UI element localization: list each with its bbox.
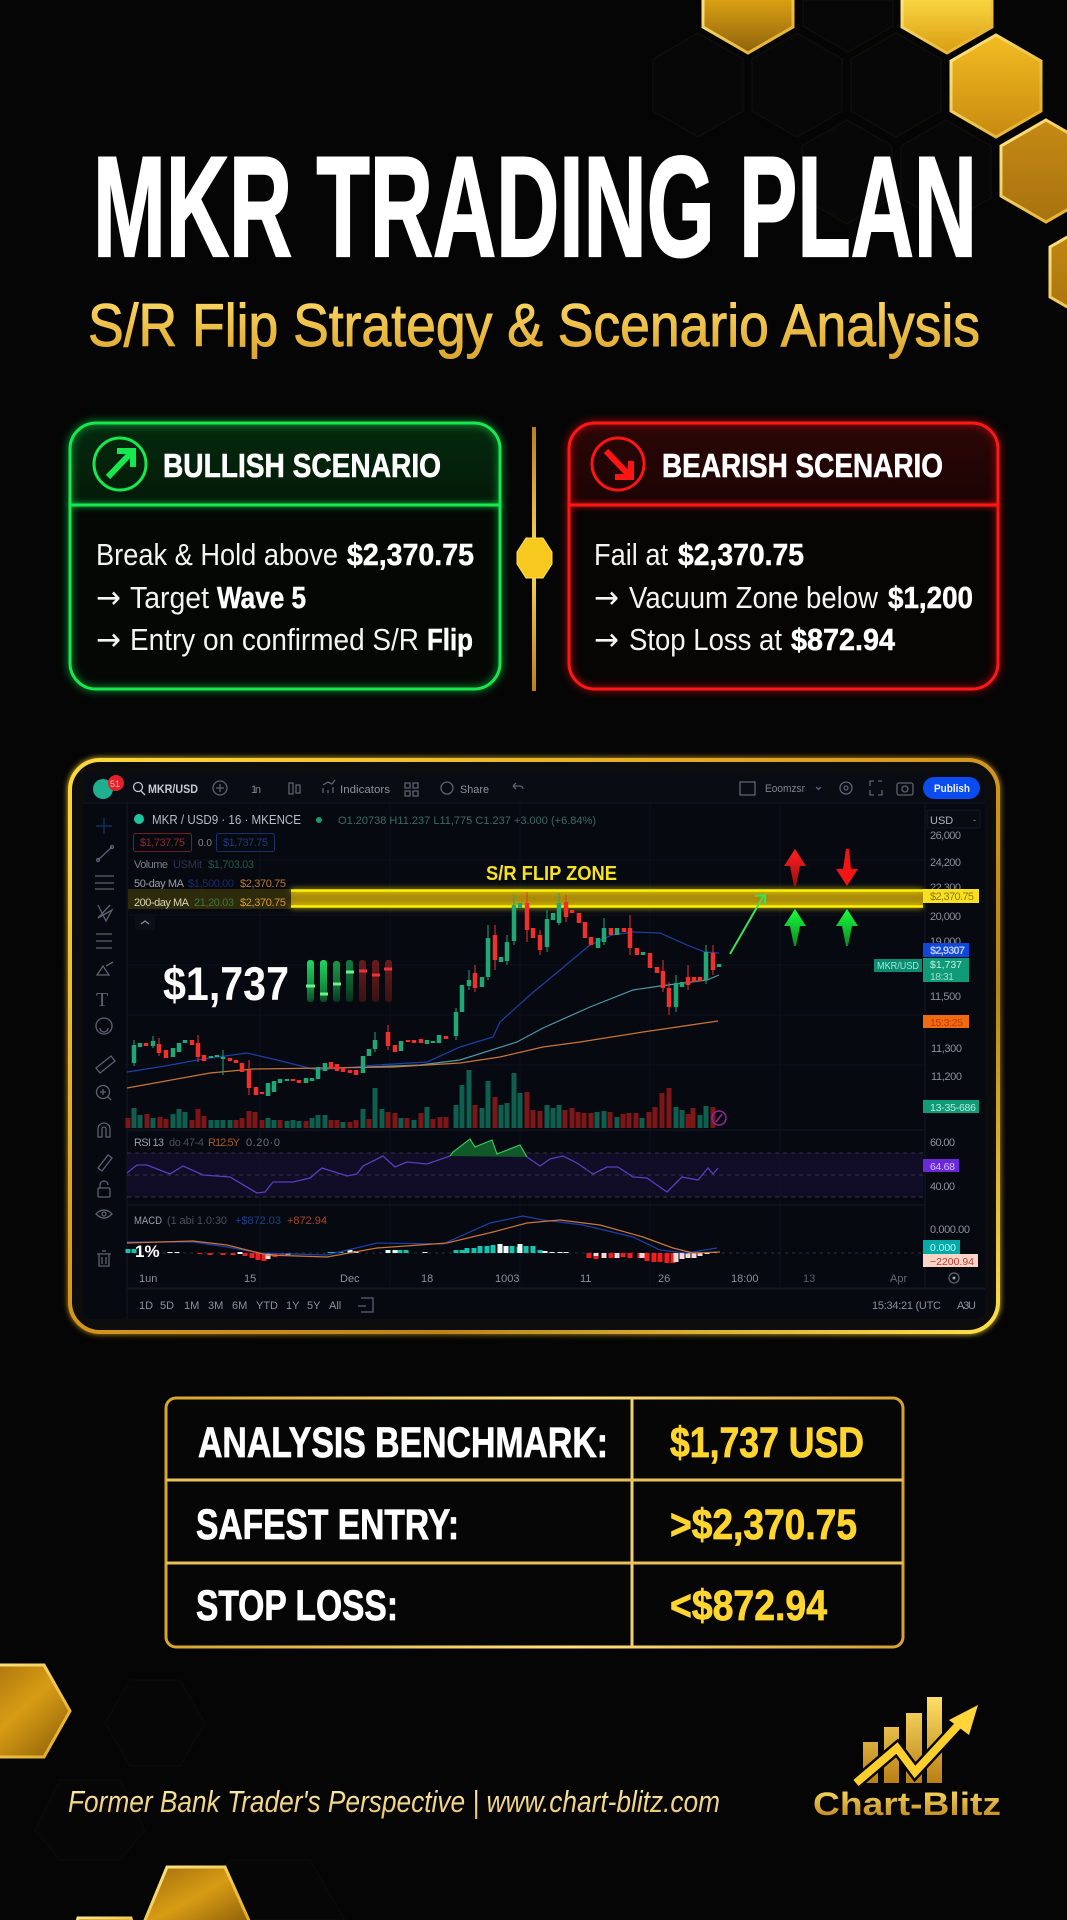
price axis: 19,000 xyxy=(930,936,961,948)
breakout arrow xyxy=(730,895,765,954)
bullish body text: → xyxy=(96,580,121,616)
time axis: 18 xyxy=(421,1273,433,1285)
panel: key levels table xyxy=(166,1398,903,1647)
chart legend text: 50-day MA xyxy=(134,878,185,890)
time axis: 11 xyxy=(580,1273,591,1285)
chart legend text: $1,737.75 xyxy=(140,837,185,849)
wordmark: Chart-Blitz xyxy=(813,1786,1001,1822)
RSI panel: 0.20·0 xyxy=(246,1137,280,1149)
subtitle: S/R Flip Strategy & Scenario Analysis xyxy=(88,292,980,359)
flip arrows xyxy=(784,849,858,946)
chart toolbar: 51 xyxy=(110,779,120,789)
S/R flip zone band: $2,370.75 xyxy=(240,897,286,909)
chart legend text: $1,737.75 xyxy=(223,837,268,849)
panel: bearish scenario xyxy=(569,423,998,689)
price axis: 13-35-686 xyxy=(930,1102,976,1114)
price axis: −2200.94 xyxy=(930,1256,974,1268)
price callout: $1,737 xyxy=(163,957,289,1010)
zone label: S/R FLIP ZONE xyxy=(486,863,617,885)
row: stop loss: STOP LOSS: xyxy=(196,1582,398,1630)
chart legend text: 0.0 xyxy=(198,838,212,849)
bullish body text: Entry on confirmed S/R xyxy=(130,622,419,657)
price axis: 0.000 xyxy=(930,1242,956,1254)
range selector: 1D xyxy=(139,1300,153,1312)
drawing tools sidebar: T xyxy=(96,989,108,1011)
price axis: 24,200 xyxy=(930,857,961,869)
hexagon xyxy=(1050,221,1067,323)
RSI panel: do 47-4 xyxy=(169,1137,204,1149)
price axis xyxy=(874,810,980,1268)
bearish body text: $1,200 xyxy=(888,580,973,615)
chart toolbar: Publish xyxy=(934,783,970,795)
price axis: 60.00 xyxy=(930,1137,955,1149)
price axis: 0.000.00 xyxy=(930,1224,970,1236)
bullish body text: Wave 5 xyxy=(217,580,306,615)
chart legend text: USMit xyxy=(173,859,202,871)
row: analysis benchmark: ANALYSIS BENCHMARK: xyxy=(198,1419,608,1467)
hexagon xyxy=(902,0,992,53)
hexagon xyxy=(951,35,1041,137)
bullish body text: $2,370.75 xyxy=(347,537,474,572)
logo: Chart-Blitz xyxy=(813,1697,1001,1822)
RSI panel: R12.5Y xyxy=(208,1137,241,1149)
range selector: 5Y xyxy=(307,1300,321,1312)
price axis: 15:3:25 xyxy=(930,1017,963,1029)
chart toolbar: Share xyxy=(460,784,489,796)
icon: rising bars and arrow xyxy=(856,1697,978,1783)
mini signal bars xyxy=(306,960,392,1002)
bearish body text: $872.94 xyxy=(791,622,896,657)
price axis: 11,500 xyxy=(930,991,961,1003)
MACD panel: (1 abi 1.0:30 xyxy=(167,1215,227,1227)
green up arrow xyxy=(836,909,858,946)
time axis xyxy=(139,1273,959,1285)
chart legend text: $2,370.75 xyxy=(240,878,286,890)
bearish heading: BEARISH SCENARIO xyxy=(662,447,943,484)
time axis: 1003 xyxy=(495,1273,519,1285)
time axis: 1un xyxy=(139,1273,157,1285)
MACD panel: +$872.03 xyxy=(235,1215,281,1227)
bearish body text: → xyxy=(594,622,619,658)
price axis: 64.68 xyxy=(930,1161,955,1173)
volume bars xyxy=(128,1070,713,1128)
time axis: 26 xyxy=(658,1273,670,1285)
price axis: - xyxy=(973,815,976,825)
row: safest entry: >$2,370.75 xyxy=(670,1501,857,1549)
price axis: 22,300 xyxy=(930,882,961,894)
bearish body text: $2,370.75 xyxy=(678,537,804,572)
chart toolbar: 1n xyxy=(251,784,261,796)
range selector: 1M xyxy=(184,1300,199,1312)
time axis: 18:00 xyxy=(731,1273,759,1285)
chart legend text: Volume xyxy=(134,859,168,871)
price axis: $2,9307 xyxy=(930,945,965,957)
row: safest entry xyxy=(196,1501,857,1549)
candlesticks xyxy=(134,892,719,1096)
time axis: Apr xyxy=(890,1273,907,1285)
MACD panel xyxy=(127,1215,923,1263)
range selector xyxy=(139,1298,976,1312)
bullish body text xyxy=(96,537,474,658)
price axis: $1,737 xyxy=(930,959,962,971)
drawing tools sidebar xyxy=(95,818,115,1266)
range selector: 6M xyxy=(232,1300,247,1312)
range selector: A3U xyxy=(957,1300,976,1312)
row: stop loss xyxy=(196,1582,827,1630)
hexagon xyxy=(0,1665,70,1757)
range selector: 5D xyxy=(160,1300,174,1312)
bearish body text: → xyxy=(594,580,619,616)
bearish body text: Vacuum Zone below xyxy=(629,580,879,615)
hexagon xyxy=(143,1867,251,1920)
RSI panel xyxy=(127,1137,923,1197)
price axis: $2,370.75 xyxy=(930,891,974,903)
chart legend text xyxy=(134,812,596,890)
icon: down arrow xyxy=(592,438,644,490)
volume marker icon xyxy=(712,1111,726,1125)
range selector: 15:34:21 (UTC xyxy=(872,1300,941,1312)
chart toolbar: MKR/USD xyxy=(148,784,198,796)
chart toolbar: Eoomzsr xyxy=(765,783,805,795)
S/R flip zone band: 200-day MA xyxy=(134,897,190,909)
range selector: YTD xyxy=(256,1300,278,1312)
chart legend text: $1,703.03 xyxy=(208,859,254,871)
center divider xyxy=(517,427,552,691)
RSI panel: RSI 13 xyxy=(134,1137,164,1149)
histogram spike: 1% xyxy=(135,1242,160,1261)
price axis: 26,000 xyxy=(930,830,961,842)
range selector: All xyxy=(329,1300,341,1312)
S/R flip zone band xyxy=(128,863,923,909)
price axis: MKR/USD xyxy=(877,960,919,972)
chart toolbar: Indicators xyxy=(340,784,391,796)
bullish body text: Target xyxy=(130,580,209,615)
chart legend text: MKR / USD9 · 16 · MKENCE xyxy=(152,812,301,827)
red down arrow xyxy=(836,849,858,886)
pair tag xyxy=(874,959,922,972)
bullish heading: BULLISH SCENARIO xyxy=(163,447,441,484)
price axis: 11,200 xyxy=(931,1071,962,1083)
row: analysis benchmark: $1,737 USD xyxy=(670,1419,864,1467)
bearish body text: Stop Loss at xyxy=(629,622,782,657)
bearish body text: Fail at xyxy=(594,537,668,572)
S/R flip zone band: 21,20.03 xyxy=(194,897,234,909)
row: stop loss: <$872.94 xyxy=(670,1582,827,1630)
panel: trading chart xyxy=(70,760,998,1332)
row: safest entry: SAFEST ENTRY: xyxy=(196,1501,459,1549)
MACD panel: MACD xyxy=(134,1215,162,1227)
time axis: 13 xyxy=(803,1273,815,1285)
range selector: 3M xyxy=(208,1300,223,1312)
icon: up arrow xyxy=(94,438,146,490)
icon: gold gem xyxy=(517,538,552,578)
chart legend text: O1.20738 H11.237 L11,775 C1.237 +3.000 (+6.84%) xyxy=(338,815,596,827)
chart toolbar xyxy=(93,775,980,799)
gold hexagons top right xyxy=(703,0,1067,323)
price axis: 11,300 xyxy=(931,1043,962,1055)
bullish body text: Flip xyxy=(427,622,473,657)
panel: bullish scenario xyxy=(70,423,500,689)
moving average lines xyxy=(127,932,719,1088)
MACD panel: +872.94 xyxy=(287,1215,327,1227)
chart legend text: $1,500.00 xyxy=(188,878,234,890)
time axis: 15 xyxy=(244,1273,256,1285)
price axis: 18:31 xyxy=(930,971,954,983)
bearish body text xyxy=(594,537,973,658)
hexagon xyxy=(703,0,793,53)
red up arrows xyxy=(784,849,806,886)
bullish body text: Break & Hold above xyxy=(96,537,338,572)
footer tagline: Former Bank Trader's Perspective | www.chart-blitz.com xyxy=(68,1784,720,1819)
price axis: 20,000 xyxy=(930,911,961,923)
time axis: Dec xyxy=(340,1273,360,1285)
gold hexagons bottom left xyxy=(0,1665,251,1920)
price axis: USD xyxy=(930,815,953,827)
hexagon xyxy=(1001,120,1067,222)
bullish body text: → xyxy=(96,622,121,658)
hexagon xyxy=(75,1918,134,1920)
green up arrow xyxy=(784,909,806,946)
price axis: 40.00 xyxy=(930,1181,955,1193)
range selector: 1Y xyxy=(286,1300,300,1312)
